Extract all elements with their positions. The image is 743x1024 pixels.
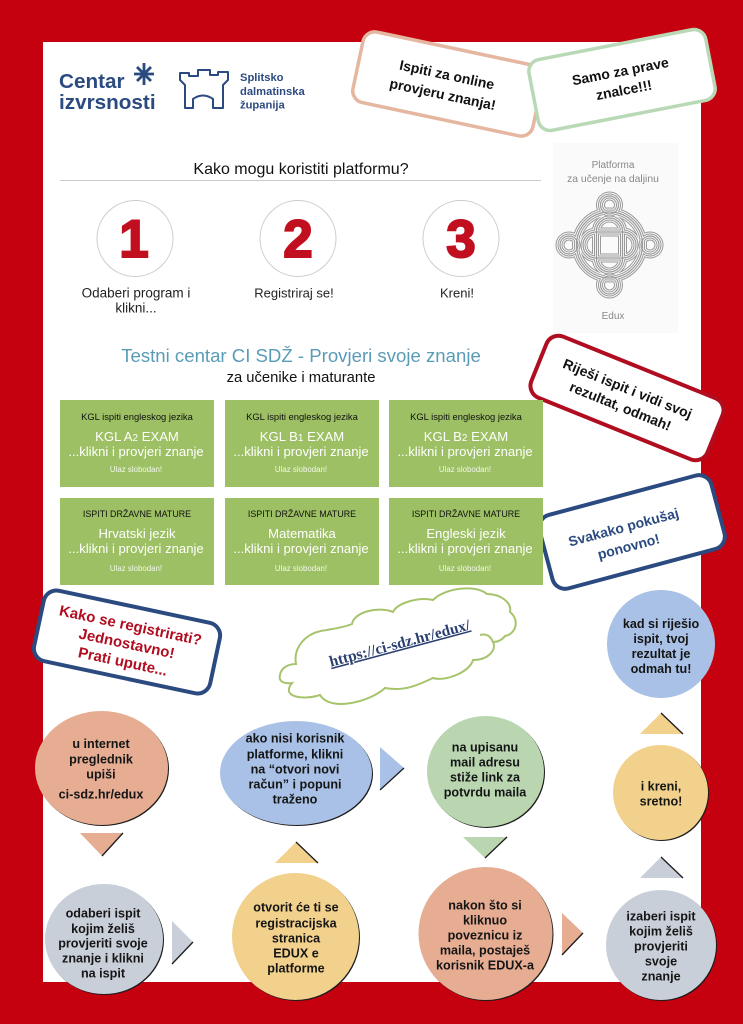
step: i kreni sretno: i kreni, (641, 780, 681, 794)
step: nakon što si: korisnik EDUX-a (436, 958, 535, 972)
callout: Riješi ispit: rezultat, odmah! (567, 378, 674, 434)
step: u internet preglednik: u internet (72, 737, 130, 751)
step: otvorit će ti se: otvorit će ti se (253, 900, 339, 914)
step: na upisanu mail adresu: mail adresu (450, 756, 520, 770)
card: Matematika: ISPITI DRŽAVNE MATURE (248, 509, 356, 519)
card: KGL A2: ...klikni i provjeri znanje (68, 444, 204, 459)
step 2 (254, 200, 336, 300)
arrow: down salmon (80, 833, 123, 856)
Edux logo panel: za učenje na daljinu (567, 174, 659, 185)
step: u internet preglednik (35, 711, 169, 826)
card: KGL B1 (225, 400, 379, 487)
card: KGL A2 (60, 400, 214, 487)
cloud with link: https://ci-sdz.hr/edux/ (328, 616, 473, 671)
card: Engleski jezik: Ulaz slobodan! (439, 564, 491, 573)
heading: Kako mogu koristiti platformu: Kako mogu koristiti platformu? (193, 161, 409, 178)
step: kad si riješio: odmah tu! (631, 662, 691, 676)
step: kad si riješio: kad si riješio (623, 617, 699, 631)
step: i kreni sretno (613, 745, 709, 841)
step: odaberi ispit: odaberi ispit (66, 906, 141, 920)
step: ako nisi korisnik: platforme, klikni (247, 748, 343, 762)
arrow: right gray (172, 921, 193, 964)
card: Hrvatski jezik: ISPITI DRŽAVNE MATURE (83, 509, 191, 519)
card: Matematika: Matematika (268, 526, 337, 541)
heading: Testni centar: Testni centar CI SDŽ - Provjeri svoje znanje (121, 345, 481, 366)
callout: Svakako pokušaj: ponovno! (596, 530, 661, 562)
card: Matematika: ...klikni i provjeri znanje (233, 541, 369, 556)
card: KGL B2: Ulaz slobodan! (439, 465, 491, 474)
step: otvorit će ti se (232, 873, 360, 1001)
step: odaberi ispit: provjeriti svoje (58, 936, 148, 950)
card: KGL B1: KGL B1 EXAM (260, 429, 344, 444)
card: Engleski jezik: ISPITI DRŽAVNE MATURE (412, 509, 520, 519)
callout: Samo za prave znalce (527, 27, 717, 133)
step 3: Kreni! (440, 286, 474, 300)
step: odaberi ispit: na ispit (81, 966, 126, 980)
step: u internet preglednik: upiši (86, 768, 116, 782)
card: KGL B2 (389, 400, 543, 487)
step: izaberi ispit: kojim želiš (629, 924, 693, 938)
step: izaberi ispit (606, 890, 717, 1001)
card: KGL A2: KGL ispiti engleskog jezika (81, 411, 194, 422)
arrow: down green (463, 837, 507, 858)
callout: Kako se registrirati (31, 588, 223, 696)
step: u internet preglednik: preglednik (69, 752, 134, 766)
callout: Svakako pokušaj: Svakako pokušaj (566, 505, 680, 549)
step: nakon što si: nakon što si (448, 898, 522, 912)
callout: Ispiti za online: provjeru znanja! (388, 75, 497, 113)
step: odaberi ispit (45, 884, 164, 995)
step: otvorit će ti se: stranica (272, 932, 321, 946)
step 1: klikni... (115, 300, 157, 316)
arrow: up yellow 2 (640, 713, 683, 734)
arrow: right blue (380, 747, 404, 790)
step 1: 1 (119, 210, 149, 269)
arrow: up gray (640, 857, 683, 878)
step 2: 2 (283, 210, 313, 269)
step 3: 3 (446, 210, 476, 269)
step: kad si riješio (607, 590, 715, 698)
callout: Riješi ispit (527, 332, 727, 464)
step: nakon što si: poveznicu iz (448, 928, 522, 942)
step: nakon što si: kliknuo (463, 914, 507, 928)
logo: Centar izvrsnosti (59, 63, 156, 114)
card: Hrvatski jezik: ...klikni i provjeri znanje (68, 541, 204, 556)
logo: Centar izvrsnosti: Centar (59, 70, 125, 93)
card: KGL A2: Ulaz slobodan! (110, 465, 162, 474)
card: KGL A2: KGL A2 EXAM (95, 429, 179, 444)
step: izaberi ispit: provjeriti (634, 940, 688, 954)
step: ako nisi korisnik: na “otvori novi (251, 762, 339, 776)
step: ako nisi korisnik: ako nisi korisnik (246, 732, 345, 746)
logo: Splitsko dalmatinska županija: dalmatinska (240, 86, 305, 98)
card: Matematika (225, 498, 379, 585)
step: u internet preglednik: ci-sdz.hr/edux (59, 788, 143, 802)
callout: Kako se registrirati: Prati upute... (77, 644, 169, 680)
step: ako nisi korisnik (220, 721, 373, 826)
card: KGL B1: KGL ispiti engleskog jezika (246, 411, 359, 422)
Edux logo panel: Edux (602, 311, 624, 322)
card: Engleski jezik: ...klikni i provjeri znanje (397, 541, 533, 556)
card: KGL B2: KGL ispiti engleskog jezika (410, 411, 523, 422)
card: KGL B1: ...klikni i provjeri znanje (233, 444, 369, 459)
step 3 (423, 200, 499, 300)
logo: Splitsko dalmatinska županija: županija (240, 100, 286, 112)
step: otvorit će ti se: platforme (267, 962, 325, 976)
callout: Ispiti za online (351, 30, 545, 138)
step: odaberi ispit: znanje i klikni (62, 952, 144, 966)
step: otvorit će ti se: registracijska (255, 916, 338, 930)
logo: Splitsko dalmatinska županija: Splitsko (240, 72, 284, 84)
card: Engleski jezik: Engleski jezik (426, 526, 506, 541)
step: izaberi ispit: izaberi ispit (626, 910, 696, 924)
step: kad si riješio: rezultat je (632, 647, 690, 661)
step: na upisanu mail adresu (427, 716, 545, 828)
card: KGL B2: ...klikni i provjeri znanje (397, 444, 533, 459)
callout: Kako se registrirati: Jednostavno! (77, 626, 176, 662)
step: odaberi ispit: kojim želiš (71, 922, 135, 936)
callout: Ispiti za online: Ispiti za online (398, 57, 496, 92)
card: KGL B1: Ulaz slobodan! (275, 465, 327, 474)
step: na upisanu mail adresu: stiže link za (450, 770, 521, 784)
step: nakon što si: maila, postaješ (440, 944, 530, 958)
callout: Riješi ispit: Riješi ispit i vidi svoj (561, 355, 694, 422)
step: izaberi ispit: znanje (641, 970, 681, 984)
Edux logo panel (553, 143, 678, 333)
card: Matematika: Ulaz slobodan! (275, 564, 327, 573)
step: na upisanu mail adresu: potvrdu maila (444, 786, 527, 800)
card: KGL B2: KGL B2 EXAM (424, 429, 508, 444)
step 1: Odaberi program i (82, 286, 190, 300)
callout: Kako se registrirati: Kako se registrirati? (58, 602, 203, 649)
card: Engleski jezik (389, 498, 543, 585)
step: kad si riješio: ispit, tvoj (633, 632, 689, 646)
cloud with link (280, 588, 516, 704)
step: izaberi ispit: svoje (645, 954, 677, 968)
card: Hrvatski jezik: Ulaz slobodan! (110, 564, 162, 573)
step: i kreni sretno: sretno! (640, 794, 682, 808)
callout: Svakako pokušaj (536, 472, 728, 592)
step 1 (82, 200, 190, 316)
subheading: za učenike i maturante (227, 370, 375, 386)
step: na upisanu mail adresu: na upisanu (452, 740, 518, 754)
step: ako nisi korisnik: račun” i popuni (248, 778, 342, 792)
callout: Samo za prave znalce: znalce!!! (595, 77, 653, 103)
callout: Samo za prave znalce: Samo za prave (571, 54, 670, 88)
step: ako nisi korisnik: traženo (273, 792, 318, 806)
step 2: Registriraj se! (254, 286, 334, 300)
Edux logo panel: Platforma (592, 160, 635, 171)
logo: Centar izvrsnosti: izvrsnosti (59, 91, 156, 114)
arrow: up yellow (275, 842, 318, 863)
step: otvorit će ti se: EDUX e (273, 946, 319, 960)
step: nakon što si (418, 867, 554, 1001)
arrow: right salmon (562, 913, 583, 955)
card: Hrvatski jezik (60, 498, 214, 585)
card: Hrvatski jezik: Hrvatski jezik (98, 526, 176, 541)
logo: Splitsko dalmatinska županija (180, 70, 305, 112)
